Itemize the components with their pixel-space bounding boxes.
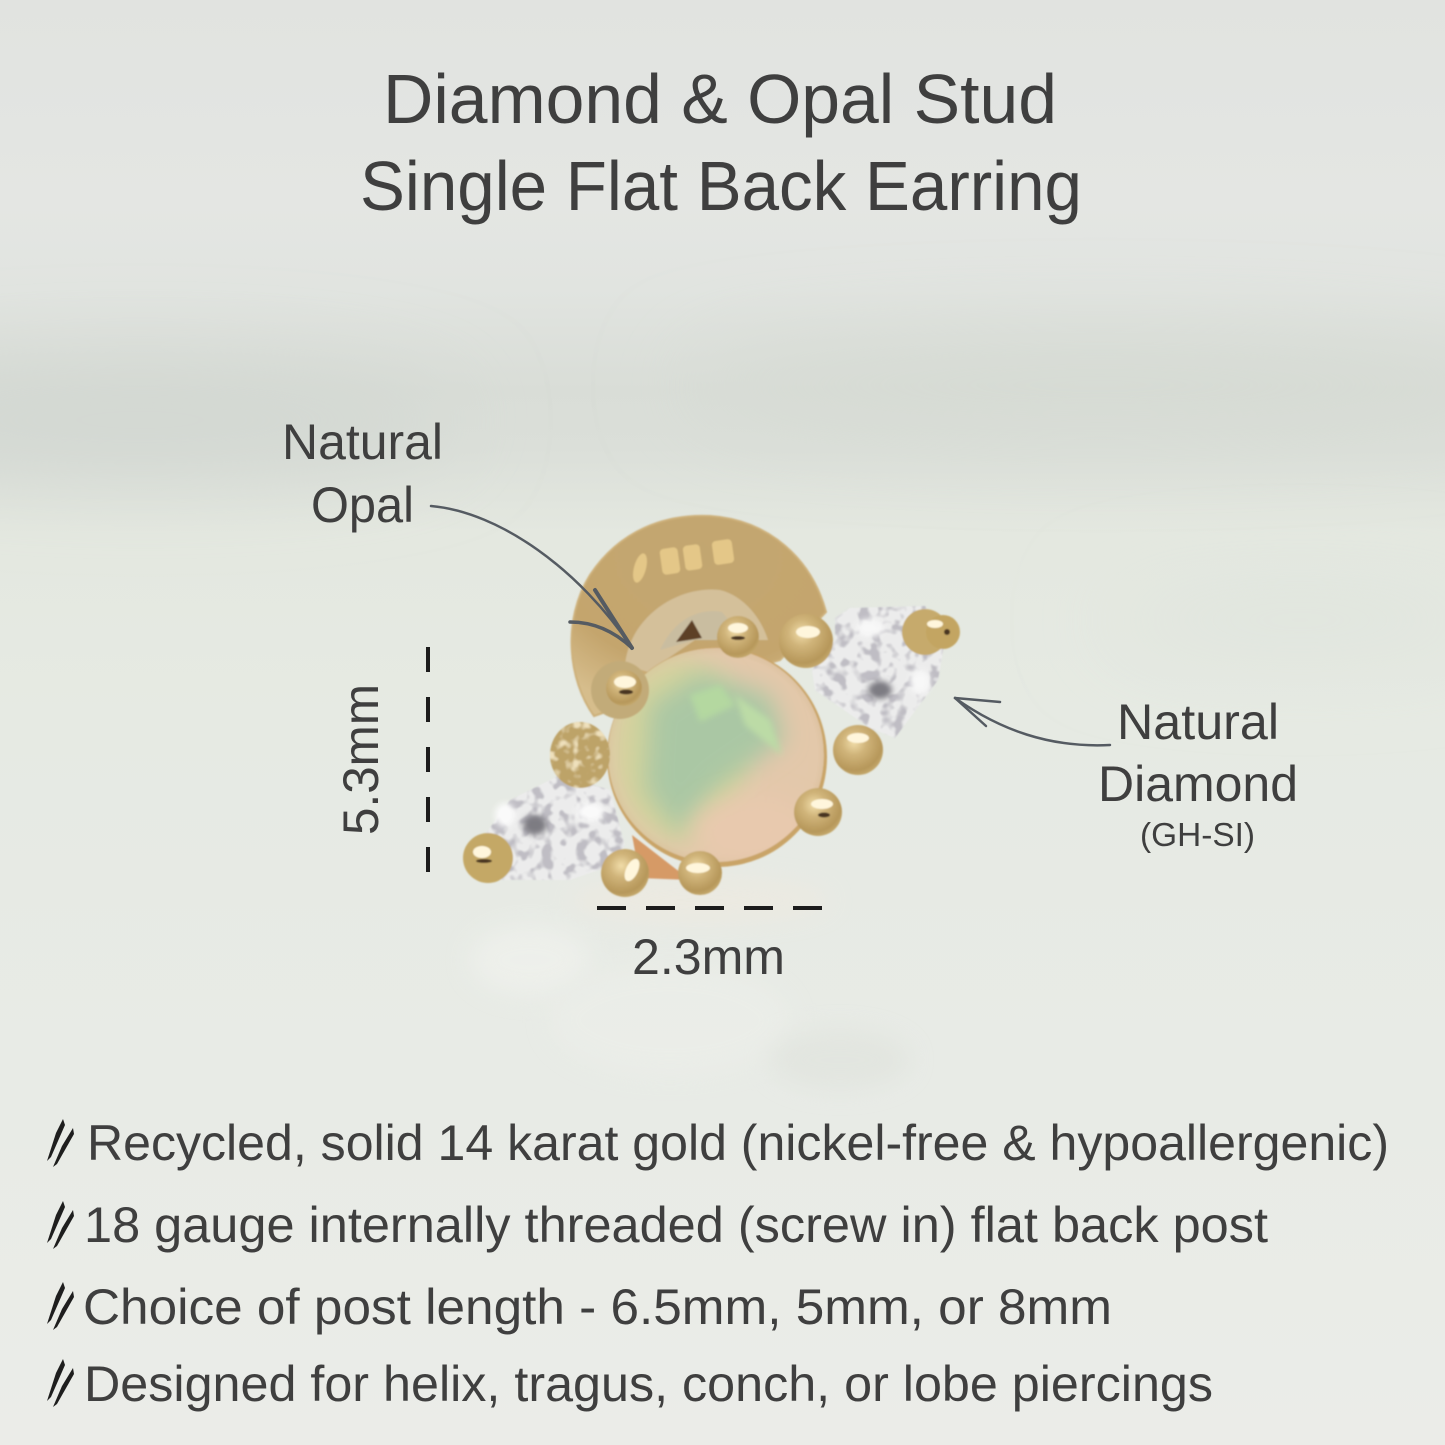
bullet item: gauge: 18 gauge internally threaded (screw in) flat back post xyxy=(84,1197,1268,1253)
label: Natural Opal: Opal xyxy=(311,477,414,533)
back disc xyxy=(572,516,826,716)
arrow: to opal xyxy=(431,506,632,648)
prong highlights xyxy=(473,620,943,883)
post base xyxy=(625,589,768,672)
label: Natural Opal: Natural xyxy=(282,414,443,470)
reflection of earring on surface xyxy=(470,878,910,1090)
prongs xyxy=(463,609,960,897)
feature list xyxy=(47,1115,1389,1412)
label: Natural Diamond: (GH-SI) xyxy=(1140,816,1255,853)
left diamond xyxy=(470,775,625,880)
title: Single Flat Back Earring xyxy=(360,147,1082,225)
dimension: height 5.3mm: 5.3mm xyxy=(333,684,389,835)
dimension: width 2.3mm: 2.3mm xyxy=(632,929,785,985)
gold setting under opal xyxy=(607,647,827,867)
right diamond xyxy=(812,606,945,738)
14k stamp marks xyxy=(630,539,735,584)
bullet item: post length: Choice of post length - 6.5mm, 5mm, or 8mm xyxy=(83,1279,1112,1335)
label: Natural Diamond: Diamond xyxy=(1098,756,1298,812)
earring illustration xyxy=(463,516,960,897)
title: Diamond & Opal Stud xyxy=(383,60,1057,138)
prong dark pits xyxy=(476,629,950,863)
label: Natural Diamond: Natural xyxy=(1117,694,1279,750)
label: Natural Opal xyxy=(282,414,443,533)
bullet item: piercings: Designed for helix, tragus, conch, or lobe piercings xyxy=(84,1356,1213,1412)
bullet item: recycled gold: Recycled, solid 14 karat gold (nickel-free & hypoallergenic) xyxy=(87,1115,1389,1171)
arrow: to diamond xyxy=(955,698,1110,745)
title xyxy=(360,60,1082,225)
label: Natural Diamond xyxy=(1098,694,1298,853)
textured shoulder bump xyxy=(550,722,610,788)
opal stone xyxy=(608,648,824,864)
